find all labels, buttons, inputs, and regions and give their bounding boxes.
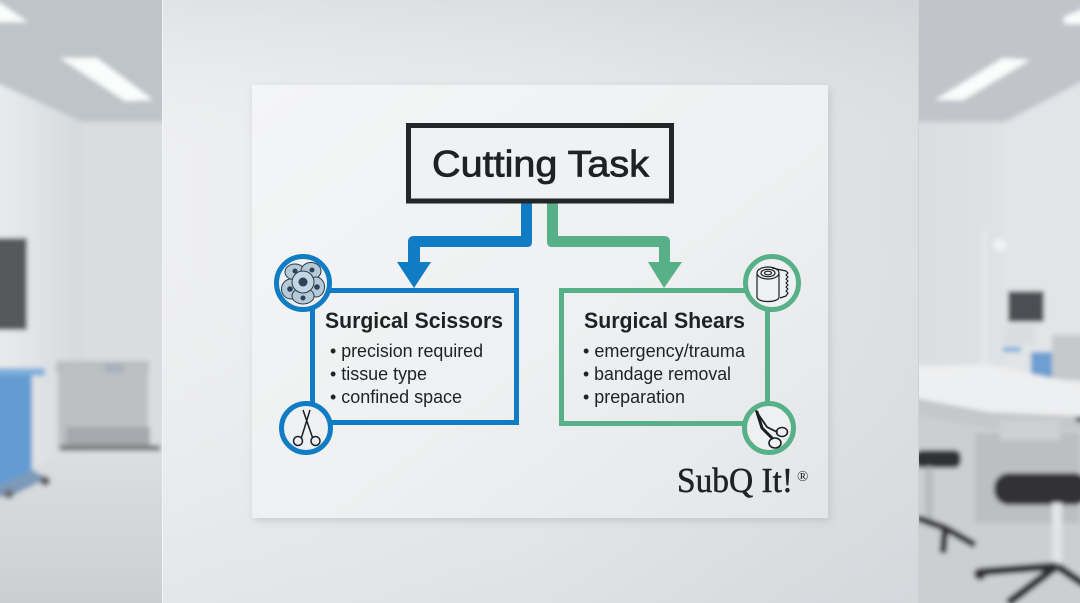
title box: Cutting Task	[432, 144, 650, 184]
heading: surgical scissors: Surgical Scissors	[325, 308, 503, 333]
bullet list: scissors	[330, 341, 483, 407]
icon: hemostat scissors	[282, 404, 330, 452]
background: blurred clinic room, left side	[0, 0, 167, 603]
icon: bandage roll	[746, 256, 798, 310]
bullet list: shears: • preparation	[583, 387, 685, 407]
bullet list: scissors: • precision required	[330, 341, 483, 361]
bullet list: shears: • emergency/trauma	[583, 341, 746, 361]
board shadow	[254, 88, 830, 521]
bullet list: scissors: • confined space	[330, 387, 462, 407]
wall panel behind the board	[162, 0, 919, 603]
heading: surgical shears: Surgical Shears	[584, 308, 745, 333]
background: blurred clinic room, right side	[915, 0, 1080, 603]
bullet list: scissors: • tissue type	[330, 364, 427, 384]
green arrow from title to shears box	[547, 203, 682, 288]
title box	[408, 126, 672, 201]
icon: bandage shears	[744, 404, 794, 452]
logo: SubQ It!: SubQ It!	[677, 461, 793, 500]
bullet list: shears	[583, 341, 746, 407]
blue arrow from title to scissors box	[397, 203, 532, 288]
panel: surgical shears	[562, 290, 768, 424]
bullet list: shears: • bandage removal	[583, 364, 731, 384]
panel: surgical scissors	[312, 290, 516, 422]
icon: tissue cells	[276, 256, 330, 310]
board: flowchart poster	[252, 85, 828, 518]
logo: SubQ It!: ®	[797, 469, 808, 485]
